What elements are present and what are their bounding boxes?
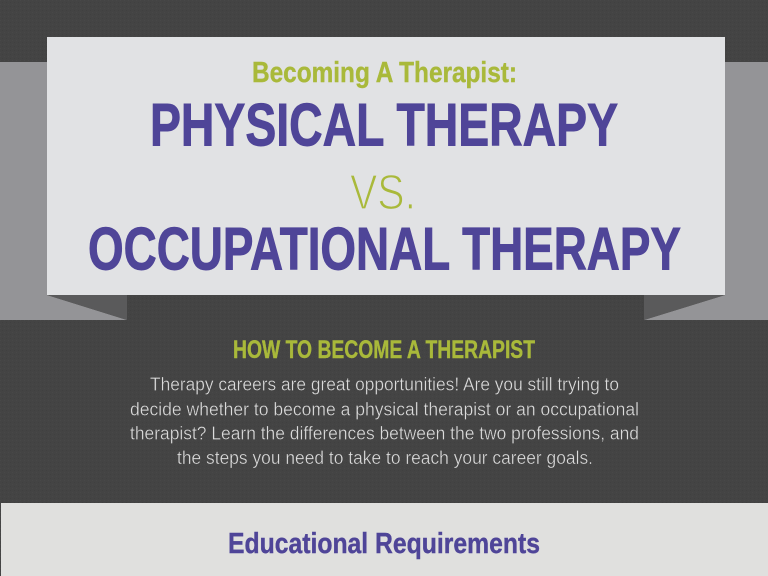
intro heading: HOW TO BECOME A THERAPIST bbox=[233, 336, 535, 364]
heading: physical therapy: PHYSICAL THERAPY bbox=[150, 92, 618, 158]
ribbon: left tail bbox=[0, 62, 127, 320]
intro paragraph: the steps you need to take to reach your career goals. bbox=[177, 448, 593, 468]
intro paragraph: therapist? Learn the differences between the two professions, and bbox=[130, 424, 639, 444]
subtitle: Becoming A Therapist: bbox=[252, 57, 517, 89]
title banner bbox=[47, 37, 725, 295]
intro paragraph: decide whether to become a physical therapist or an occupational bbox=[130, 400, 639, 420]
intro paragraph: Therapy careers are great opportunities! Are you still trying to bbox=[150, 374, 619, 394]
ribbon: right tail bbox=[644, 62, 768, 320]
educational requirements panel bbox=[1, 503, 768, 576]
intro section bbox=[130, 336, 639, 468]
intro paragraph bbox=[130, 374, 639, 468]
versus label: VS. bbox=[350, 166, 416, 220]
section heading: Educational Requirements bbox=[228, 528, 540, 560]
